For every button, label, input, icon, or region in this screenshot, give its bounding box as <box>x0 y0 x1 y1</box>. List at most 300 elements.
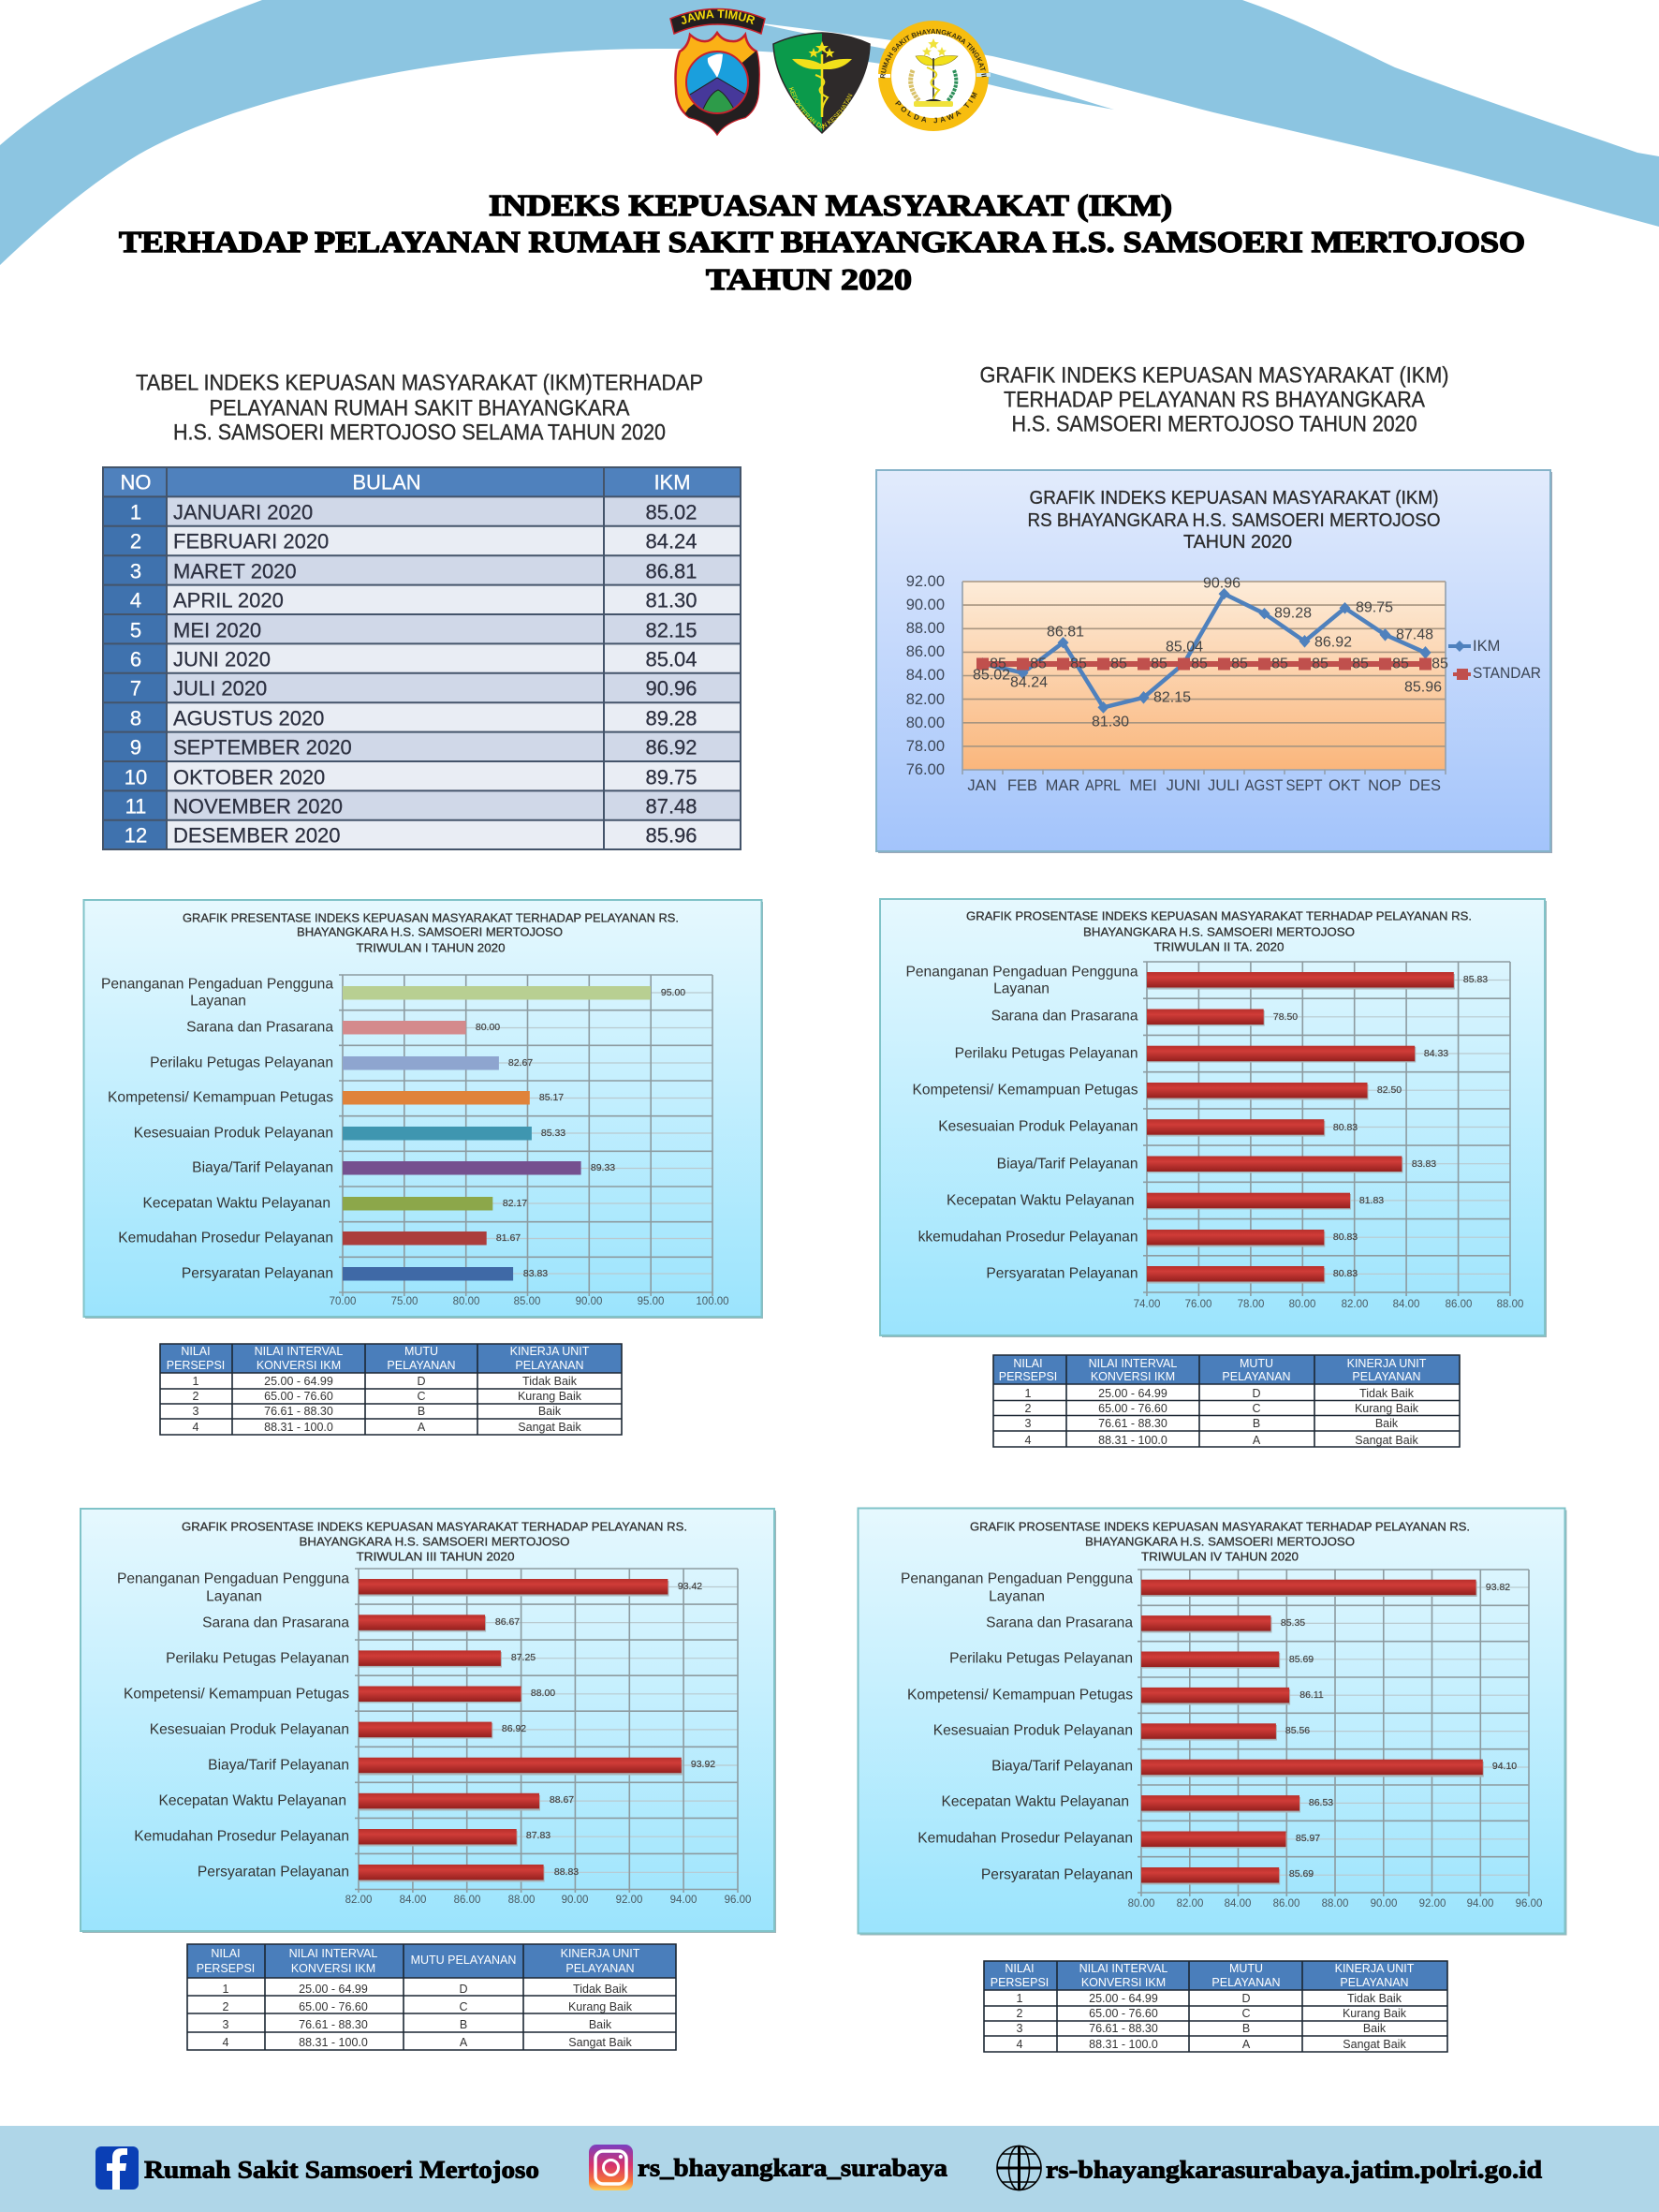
table: conversion Q1: A <box>418 1421 426 1434</box>
table: conversion Q1: KONVERSI IKM <box>257 1359 341 1372</box>
heading: table <box>136 371 703 446</box>
axis labels Q4: 94.00 <box>1467 1898 1493 1910</box>
table: conversion Q3: 4 <box>223 2036 229 2049</box>
category labels Q2: Layanan <box>993 981 1050 996</box>
data labels: 85 <box>1191 656 1208 672</box>
data labels: 85 <box>1392 656 1409 672</box>
data labels: 85.02 <box>973 667 1010 684</box>
axis labels Q1: 100.00 <box>696 1296 729 1307</box>
table: conversion Q4: PELAYANAN <box>1340 1976 1409 1989</box>
table: conversion Q2 <box>993 1355 1460 1447</box>
table: conversion Q1: Baik <box>538 1405 562 1418</box>
category labels Q4: Penanganan Pengaduan Pengguna <box>901 1571 1133 1586</box>
table: conversion Q3: 88.31 - 100.0 <box>299 2036 368 2049</box>
table: conversion Q4: Sangat Baik <box>1343 2038 1406 2051</box>
category labels Q1: Sarana dan Prasarana <box>186 1019 333 1036</box>
axis labels Q2: 80.00 <box>1289 1299 1315 1310</box>
value labels Q1: 82.17 <box>503 1198 527 1209</box>
x axis labels: SEPT <box>1286 777 1322 794</box>
table: conversion Q2: 2 <box>1025 1402 1032 1415</box>
value labels Q3: 87.83 <box>526 1830 551 1841</box>
table: monthly IKM: 84.24 <box>645 530 697 553</box>
axis labels Q1: 95.00 <box>638 1296 664 1307</box>
table: monthly IKM: 85.02 <box>645 500 697 524</box>
table: conversion Q3: Baik <box>589 2018 612 2031</box>
table: monthly IKM: 86.92 <box>645 736 697 759</box>
axis labels Q1: 75.00 <box>391 1296 418 1307</box>
table: conversion Q3: PELAYANAN <box>565 1962 635 1975</box>
table: conversion Q3: C <box>459 2000 468 2013</box>
table: monthly IKM: DESEMBER 2020 <box>173 824 341 847</box>
category labels Q2 <box>905 965 1138 1281</box>
y axis labels: 84.00 <box>906 667 945 684</box>
table: monthly IKM: 7 <box>130 676 141 700</box>
table: conversion Q2: B <box>1253 1417 1260 1430</box>
chart title Q4 <box>970 1519 1470 1564</box>
data labels: 85 <box>1271 656 1288 672</box>
axis labels Q2: 74.00 <box>1134 1299 1160 1310</box>
logo: Polda Jawa Timur shield: JAWA TIMUR <box>682 9 755 24</box>
chart title Q2 <box>966 908 1472 953</box>
chart title Q1: GRAFIK PRESENTASE INDEKS KEPUASAN MASYARAKAT TERHADAP PELAYANAN RS. <box>183 910 679 925</box>
icon: instagram <box>589 2145 633 2190</box>
category labels Q3: Kompetensi/ Kemampuan Petugas <box>124 1686 349 1703</box>
value labels Q1: 81.67 <box>496 1232 521 1244</box>
table: conversion Q2: Kurang Baik <box>1355 1402 1419 1415</box>
table: monthly IKM: IKM <box>653 470 691 494</box>
panel: quarter I chart <box>84 900 763 1319</box>
table: conversion Q1: B <box>418 1405 425 1418</box>
table: monthly IKM: 9 <box>130 736 141 759</box>
legend <box>1448 638 1541 682</box>
value labels Q1 <box>476 987 685 1279</box>
value labels Q2: 81.83 <box>1359 1195 1384 1206</box>
axis labels Q4: 84.00 <box>1225 1898 1251 1910</box>
value labels Q4: 85.69 <box>1289 1868 1314 1880</box>
x axis labels: FEB <box>1007 777 1037 794</box>
value labels Q2: 80.83 <box>1333 1268 1358 1279</box>
table: conversion Q3: B <box>460 2018 467 2031</box>
data labels: 85 <box>1110 656 1127 672</box>
axis labels Q2: 84.00 <box>1393 1299 1419 1310</box>
title: INDEKS KEPUASAN MASYARAKAT (IKM) <box>489 188 1172 222</box>
table: conversion Q2: KINERJA UNIT <box>1347 1357 1427 1370</box>
bars Q4 <box>1141 1580 1484 1884</box>
chart title Q1: BHAYANGKARA H.S. SAMSOERI MERTOJOSO <box>297 925 563 938</box>
axis labels Q2 <box>1134 1299 1523 1310</box>
axis labels Q1: 80.00 <box>453 1296 479 1307</box>
chart title Q4: GRAFIK PROSENTASE INDEKS KEPUASAN MASYARAKAT TERHADAP PELAYANAN RS. <box>970 1519 1470 1534</box>
category labels Q2: Kompetensi/ Kemampuan Petugas <box>913 1083 1138 1098</box>
value labels Q4: 86.11 <box>1299 1689 1324 1701</box>
category labels Q3: Layanan <box>206 1588 262 1605</box>
bars Q1 <box>343 986 651 1281</box>
chart title Q3: BHAYANGKARA H.S. SAMSOERI MERTOJOSO <box>300 1534 569 1549</box>
table: monthly IKM: 8 <box>130 706 141 730</box>
category labels Q2: Biaya/Tarif Pelayanan <box>997 1156 1138 1172</box>
category labels Q2: Kesesuaian Produk Pelayanan <box>938 1118 1138 1135</box>
value labels Q1: 85.17 <box>539 1092 564 1103</box>
table: conversion Q2: 1 <box>1025 1387 1032 1400</box>
table: conversion Q3: D <box>459 1983 468 1996</box>
chart title Q3: GRAFIK PROSENTASE INDEKS KEPUASAN MASYARAKAT TERHADAP PELAYANAN RS. <box>182 1519 687 1534</box>
data labels: 85 <box>1352 656 1369 672</box>
table: conversion Q3: PERSEPSI <box>197 1962 255 1975</box>
table: conversion Q3: 3 <box>223 2018 229 2031</box>
table: conversion Q4: A <box>1242 2038 1251 2051</box>
axis labels Q3: 86.00 <box>454 1895 480 1906</box>
line chart title <box>1028 488 1440 553</box>
icon: facebook <box>95 2146 139 2190</box>
value labels Q1: 83.83 <box>523 1268 548 1279</box>
table: conversion Q1: 25.00 - 64.99 <box>264 1375 333 1388</box>
table: conversion Q4: C <box>1241 2007 1251 2020</box>
grid Q2 <box>1143 962 1510 1296</box>
table: conversion Q2: 88.31 - 100.0 <box>1098 1434 1167 1447</box>
chart title Q1: TRIWULAN I TAHUN 2020 <box>356 940 506 955</box>
series: STANDAR line <box>976 657 1431 671</box>
table: monthly IKM: 2 <box>130 530 141 553</box>
data labels: 85.96 <box>1404 680 1442 695</box>
table: conversion Q4: KONVERSI IKM <box>1081 1976 1166 1989</box>
chart title Q4: BHAYANGKARA H.S. SAMSOERI MERTOJOSO <box>1085 1534 1355 1549</box>
axis labels Q3 <box>345 1895 751 1906</box>
table: conversion Q4: 2 <box>1017 2007 1023 2020</box>
table: conversion Q4: B <box>1242 2022 1250 2035</box>
x axis labels <box>967 777 1441 794</box>
table: conversion Q2: C <box>1252 1402 1261 1415</box>
table: conversion Q3: NILAI INTERVAL <box>289 1947 377 1960</box>
table: monthly IKM: 4 <box>130 588 141 612</box>
table: conversion Q1: NILAI <box>181 1345 211 1358</box>
axis labels Q4 <box>1128 1898 1542 1910</box>
table: monthly IKM: 90.96 <box>645 676 697 700</box>
logo: Kedokteran dan Kesehatan shield: KEDOKTERAN DAN KESEHATAN <box>788 87 852 130</box>
table: conversion Q2: NILAI INTERVAL <box>1089 1357 1177 1370</box>
table: conversion Q3: A <box>460 2036 468 2049</box>
table: conversion Q4: Kurang Baik <box>1343 2007 1407 2020</box>
category labels Q3: Perilaku Petugas Pelayanan <box>166 1650 349 1667</box>
data labels <box>973 575 1448 730</box>
axis labels Q3: 94.00 <box>670 1895 697 1906</box>
table: conversion Q3: 1 <box>223 1983 229 1996</box>
table: monthly IKM: JANUARI 2020 <box>173 500 313 524</box>
axis labels Q3: 84.00 <box>400 1895 426 1906</box>
logo: Kedokteran dan Kesehatan shield <box>772 32 871 134</box>
category labels Q2: Perilaku Petugas Pelayanan <box>955 1045 1138 1062</box>
value labels Q3: 87.25 <box>511 1652 536 1663</box>
heading: line chart: TERHADAP PELAYANAN RS BHAYANGKARA <box>1004 388 1425 412</box>
table: conversion Q4 <box>984 1961 1447 2052</box>
table: conversion Q1: Kurang Baik <box>518 1390 582 1403</box>
data labels: 85 <box>1030 656 1047 672</box>
axis labels Q3: 82.00 <box>345 1895 372 1906</box>
table: conversion Q2: Baik <box>1375 1417 1399 1430</box>
heading: table: TABEL INDEKS KEPUASAN MASYARAKAT (IKM)TERHADAP <box>136 371 703 395</box>
title: TERHADAP PELAYANAN RUMAH SAKIT BHAYANGKARA H.S. SAMSOERI MERTOJOSO <box>119 225 1525 258</box>
value labels Q2: 80.83 <box>1333 1122 1358 1133</box>
axis labels Q2: 88.00 <box>1497 1299 1523 1310</box>
table: conversion Q3: Tidak Baik <box>573 1983 628 1996</box>
table: conversion Q1: MUTU <box>404 1345 438 1358</box>
logos <box>669 7 991 137</box>
data labels: 85 <box>1231 656 1248 672</box>
data labels: 85 <box>990 656 1006 672</box>
value labels Q4 <box>1281 1582 1517 1880</box>
category labels Q3: Kecepatan Waktu Pelayanan <box>158 1792 346 1809</box>
value labels Q3: 86.67 <box>495 1616 520 1628</box>
category labels Q1: Kompetensi/ Kemampuan Petugas <box>108 1090 333 1105</box>
table: conversion Q1 <box>160 1344 622 1435</box>
table: conversion Q1: 2 <box>193 1390 199 1403</box>
value labels Q3: 93.42 <box>678 1581 702 1592</box>
table: monthly IKM: 85.04 <box>645 648 697 671</box>
bars Q2 <box>1147 972 1455 1283</box>
logo: Rumah Sakit Bhayangkara round seal <box>878 21 991 131</box>
table: conversion Q1: Sangat Baik <box>518 1421 581 1434</box>
value labels Q1: 95.00 <box>661 987 685 998</box>
table: conversion Q1: KINERJA UNIT <box>510 1345 590 1358</box>
x axis labels: DES <box>1409 777 1441 794</box>
legend: STANDAR <box>1473 665 1541 682</box>
value labels Q4: 93.82 <box>1486 1582 1510 1593</box>
value labels Q1: 80.00 <box>476 1022 500 1033</box>
category labels Q2: Penanganan Pengaduan Pengguna <box>905 965 1138 980</box>
data labels: 84.24 <box>1010 674 1048 691</box>
table: monthly IKM: BULAN <box>352 470 421 494</box>
table: monthly IKM: SEPTEMBER 2020 <box>173 736 352 759</box>
table: conversion Q4: MUTU <box>1229 1962 1263 1975</box>
panel: quarter II chart <box>880 899 1547 1337</box>
heading: table: PELAYANAN RUMAH SAKIT BHAYANGKARA <box>210 395 629 421</box>
title: TAHUN 2020 <box>706 262 912 296</box>
y axis labels: 90.00 <box>906 597 945 613</box>
chart title Q2: BHAYANGKARA H.S. SAMSOERI MERTOJOSO <box>1083 925 1355 938</box>
category labels Q4 <box>901 1571 1133 1882</box>
value labels Q3: 88.83 <box>554 1866 579 1878</box>
x axis labels: MEI <box>1129 777 1157 794</box>
panel: quarter IV chart <box>858 1508 1567 1935</box>
x axis labels: NOP <box>1368 777 1402 794</box>
category labels Q2: Persyaratan Pelayanan <box>986 1266 1138 1281</box>
table: monthly IKM: 6 <box>130 648 141 671</box>
line chart title: TAHUN 2020 <box>1183 532 1292 553</box>
table: conversion Q4: NILAI INTERVAL <box>1079 1962 1167 1975</box>
value labels Q3: 88.67 <box>550 1794 574 1806</box>
table: conversion Q2: PERSEPSI <box>999 1370 1057 1383</box>
category labels Q4: Persyaratan Pelayanan <box>981 1867 1133 1882</box>
heading: table: H.S. SAMSOERI MERTOJOSO SELAMA TAHUN 2020 <box>173 420 666 446</box>
table: conversion Q2: Tidak Baik <box>1359 1387 1415 1400</box>
text: facebook name: Rumah Sakit Samsoeri Mertojoso <box>144 2156 539 2184</box>
value labels Q2: 78.50 <box>1273 1011 1298 1023</box>
table: conversion Q4: 1 <box>1017 1992 1023 2005</box>
data labels: 87.48 <box>1396 627 1433 642</box>
category labels Q1: Layanan <box>190 993 246 1010</box>
logo: Rumah Sakit Bhayangkara round seal: RUMAH SAKIT BHAYANGKARA TINGKAT II <box>880 28 987 79</box>
y axis labels: 82.00 <box>906 691 945 708</box>
table: monthly IKM <box>103 467 741 849</box>
category labels Q3: Persyaratan Pelayanan <box>198 1864 349 1880</box>
background swoosh <box>0 0 1659 265</box>
value labels Q4: 94.10 <box>1492 1761 1517 1772</box>
value labels Q1: 85.33 <box>541 1128 565 1139</box>
table: conversion Q3: KINERJA UNIT <box>561 1947 640 1960</box>
y axis labels <box>906 573 945 778</box>
table: conversion Q2: MUTU <box>1240 1357 1273 1370</box>
x axis labels: AGST <box>1245 777 1283 794</box>
title <box>119 188 1525 296</box>
y axis labels: 78.00 <box>906 738 945 755</box>
value labels Q4: 85.69 <box>1289 1654 1314 1665</box>
category labels Q1: Penanganan Pengaduan Pengguna <box>101 976 333 993</box>
axis labels Q4: 88.00 <box>1322 1898 1348 1910</box>
table: conversion Q1: 1 <box>193 1375 199 1388</box>
value labels Q1: 89.33 <box>591 1162 615 1173</box>
x axis labels: OKT <box>1329 777 1360 794</box>
table: conversion Q3: MUTU PELAYANAN <box>411 1954 516 1967</box>
category labels Q3: Kemudahan Prosedur Pelayanan <box>134 1828 349 1845</box>
category labels Q1: Persyaratan Pelayanan <box>182 1266 333 1281</box>
category labels Q1 <box>101 976 333 1281</box>
table: conversion Q4: NILAI <box>1005 1962 1035 1975</box>
y axis labels: 80.00 <box>906 715 945 731</box>
table: monthly IKM: MEI 2020 <box>173 618 261 642</box>
value labels Q3: 86.92 <box>502 1723 526 1734</box>
table: conversion Q1: 65.00 - 76.60 <box>264 1390 333 1403</box>
data labels: 81.30 <box>1092 714 1129 730</box>
data labels: 85 <box>1431 656 1448 672</box>
table: conversion Q2: KONVERSI IKM <box>1091 1370 1175 1383</box>
table: conversion Q1: 76.61 - 88.30 <box>264 1405 333 1418</box>
y axis labels: 88.00 <box>906 620 945 637</box>
x axis labels: JAN <box>967 777 997 794</box>
category labels Q4: Kemudahan Prosedur Pelayanan <box>918 1830 1133 1847</box>
table: conversion Q3 <box>187 1944 676 2050</box>
panel: line chart <box>876 470 1552 853</box>
category labels Q3: Sarana dan Prasarana <box>202 1615 349 1631</box>
axis labels Q1: 85.00 <box>514 1296 540 1307</box>
table: conversion Q2: D <box>1252 1387 1261 1400</box>
category labels Q2: kkemudahan Prosedur Pelayanan <box>918 1229 1138 1246</box>
category labels Q4: Kecepatan Waktu Pelayanan <box>941 1794 1129 1809</box>
grid Q1 <box>339 975 712 1296</box>
table: conversion Q1: D <box>417 1375 426 1388</box>
table: conversion Q2: PELAYANAN <box>1222 1370 1291 1383</box>
table: conversion Q4: Baik <box>1363 2022 1387 2035</box>
axis labels Q4: 92.00 <box>1419 1898 1446 1910</box>
logo: Polda Jawa Timur shield <box>669 7 766 137</box>
table: monthly IKM: 89.28 <box>645 706 697 730</box>
category labels Q4: Biaya/Tarif Pelayanan <box>991 1759 1133 1774</box>
table: conversion Q1: 88.31 - 100.0 <box>264 1421 333 1434</box>
category labels Q1: Biaya/Tarif Pelayanan <box>192 1159 333 1176</box>
axis labels Q2: 82.00 <box>1342 1299 1368 1310</box>
table: conversion Q4: 88.31 - 100.0 <box>1089 2038 1158 2051</box>
value labels Q2: 83.83 <box>1412 1158 1436 1170</box>
text: website: rs-bhayangkarasurabaya.jatim.polri.go.id <box>1046 2156 1543 2184</box>
line chart title: GRAFIK INDEKS KEPUASAN MASYARAKAT (IKM) <box>1030 488 1438 509</box>
table: monthly IKM: FEBRUARI 2020 <box>173 530 329 553</box>
value labels Q4: 85.97 <box>1296 1833 1320 1844</box>
table: monthly IKM: MARET 2020 <box>173 560 297 582</box>
table: conversion Q3: KONVERSI IKM <box>291 1962 375 1975</box>
table: conversion Q1: PERSEPSI <box>167 1359 225 1372</box>
table: conversion Q1: PELAYANAN <box>515 1359 584 1372</box>
data labels: 89.75 <box>1356 599 1393 616</box>
table: monthly IKM: 82.15 <box>645 618 697 642</box>
table: conversion Q1: PELAYANAN <box>387 1359 456 1372</box>
category labels Q3: Biaya/Tarif Pelayanan <box>208 1757 349 1774</box>
table: conversion Q1: Tidak Baik <box>522 1375 578 1388</box>
table: conversion Q4: 25.00 - 64.99 <box>1089 1992 1158 2005</box>
table: monthly IKM: APRIL 2020 <box>173 588 284 612</box>
value labels Q3 <box>495 1581 715 1878</box>
axis labels Q4: 90.00 <box>1371 1898 1397 1910</box>
table: conversion Q4: KINERJA UNIT <box>1335 1962 1415 1975</box>
axis labels Q4: 82.00 <box>1177 1898 1203 1910</box>
axis labels Q1: 90.00 <box>576 1296 602 1307</box>
table: conversion Q4: Tidak Baik <box>1347 1992 1402 2005</box>
category labels Q2: Kecepatan Waktu Pelayanan <box>947 1193 1135 1208</box>
value labels Q1: 82.67 <box>508 1057 533 1069</box>
table: monthly IKM: JUNI 2020 <box>173 648 271 671</box>
chart title Q1 <box>183 910 679 955</box>
table: monthly IKM: 81.30 <box>645 588 697 612</box>
axis labels Q3: 88.00 <box>508 1895 535 1906</box>
axis labels Q2: 78.00 <box>1238 1299 1264 1310</box>
data labels: 85 <box>1312 656 1329 672</box>
table: monthly IKM: 5 <box>130 618 141 642</box>
table: conversion Q3: Kurang Baik <box>568 2000 633 2013</box>
table: monthly IKM: NOVEMBER 2020 <box>173 794 343 818</box>
heading: line chart <box>979 363 1449 436</box>
axis labels Q4: 96.00 <box>1516 1898 1542 1910</box>
footer band <box>0 2126 1659 2212</box>
table: conversion Q4: 65.00 - 76.60 <box>1089 2007 1158 2020</box>
axis labels Q3: 90.00 <box>562 1895 588 1906</box>
axis labels Q2: 86.00 <box>1446 1299 1472 1310</box>
table: conversion Q4: PERSEPSI <box>991 1976 1049 1989</box>
value labels Q4: 85.56 <box>1285 1725 1310 1736</box>
axis labels Q2: 76.00 <box>1185 1299 1211 1310</box>
data labels: 86.81 <box>1047 624 1084 641</box>
heading: line chart: H.S. SAMSOERI MERTOJOSO TAHUN 2020 <box>1011 412 1417 436</box>
chart title Q2: TRIWULAN II TA. 2020 <box>1153 940 1285 953</box>
value labels Q2 <box>1273 974 1488 1279</box>
table: conversion Q3: 2 <box>223 2000 229 2013</box>
table: conversion Q4: D <box>1241 1992 1251 2005</box>
table: conversion Q4: PELAYANAN <box>1211 1976 1281 1989</box>
table: monthly IKM: AGUSTUS 2020 <box>173 706 324 730</box>
category labels Q1: Kesesuaian Produk Pelayanan <box>134 1126 333 1141</box>
table: conversion Q2: 76.61 - 88.30 <box>1098 1417 1167 1430</box>
category labels Q4: Sarana dan Prasarana <box>986 1615 1133 1631</box>
chart title Q4: TRIWULAN IV TAHUN 2020 <box>1141 1549 1299 1564</box>
chart title Q2: GRAFIK PROSENTASE INDEKS KEPUASAN MASYARAKAT TERHADAP PELAYANAN RS. <box>966 908 1472 923</box>
text: instagram handle: rs_bhayangkara_surabaya <box>638 2154 947 2182</box>
table: conversion Q2: PELAYANAN <box>1352 1370 1421 1383</box>
axis labels Q4: 86.00 <box>1273 1898 1299 1910</box>
x axis labels: APRL <box>1085 777 1121 794</box>
table: conversion Q2: 4 <box>1025 1434 1032 1447</box>
category labels Q4: Layanan <box>989 1588 1045 1605</box>
category labels Q4: Kesesuaian Produk Pelayanan <box>933 1723 1133 1738</box>
table: conversion Q1: 4 <box>193 1421 199 1434</box>
data labels: 90.96 <box>1203 575 1241 592</box>
table: conversion Q2: A <box>1253 1434 1261 1447</box>
table: conversion Q3: 65.00 - 76.60 <box>299 2000 368 2013</box>
